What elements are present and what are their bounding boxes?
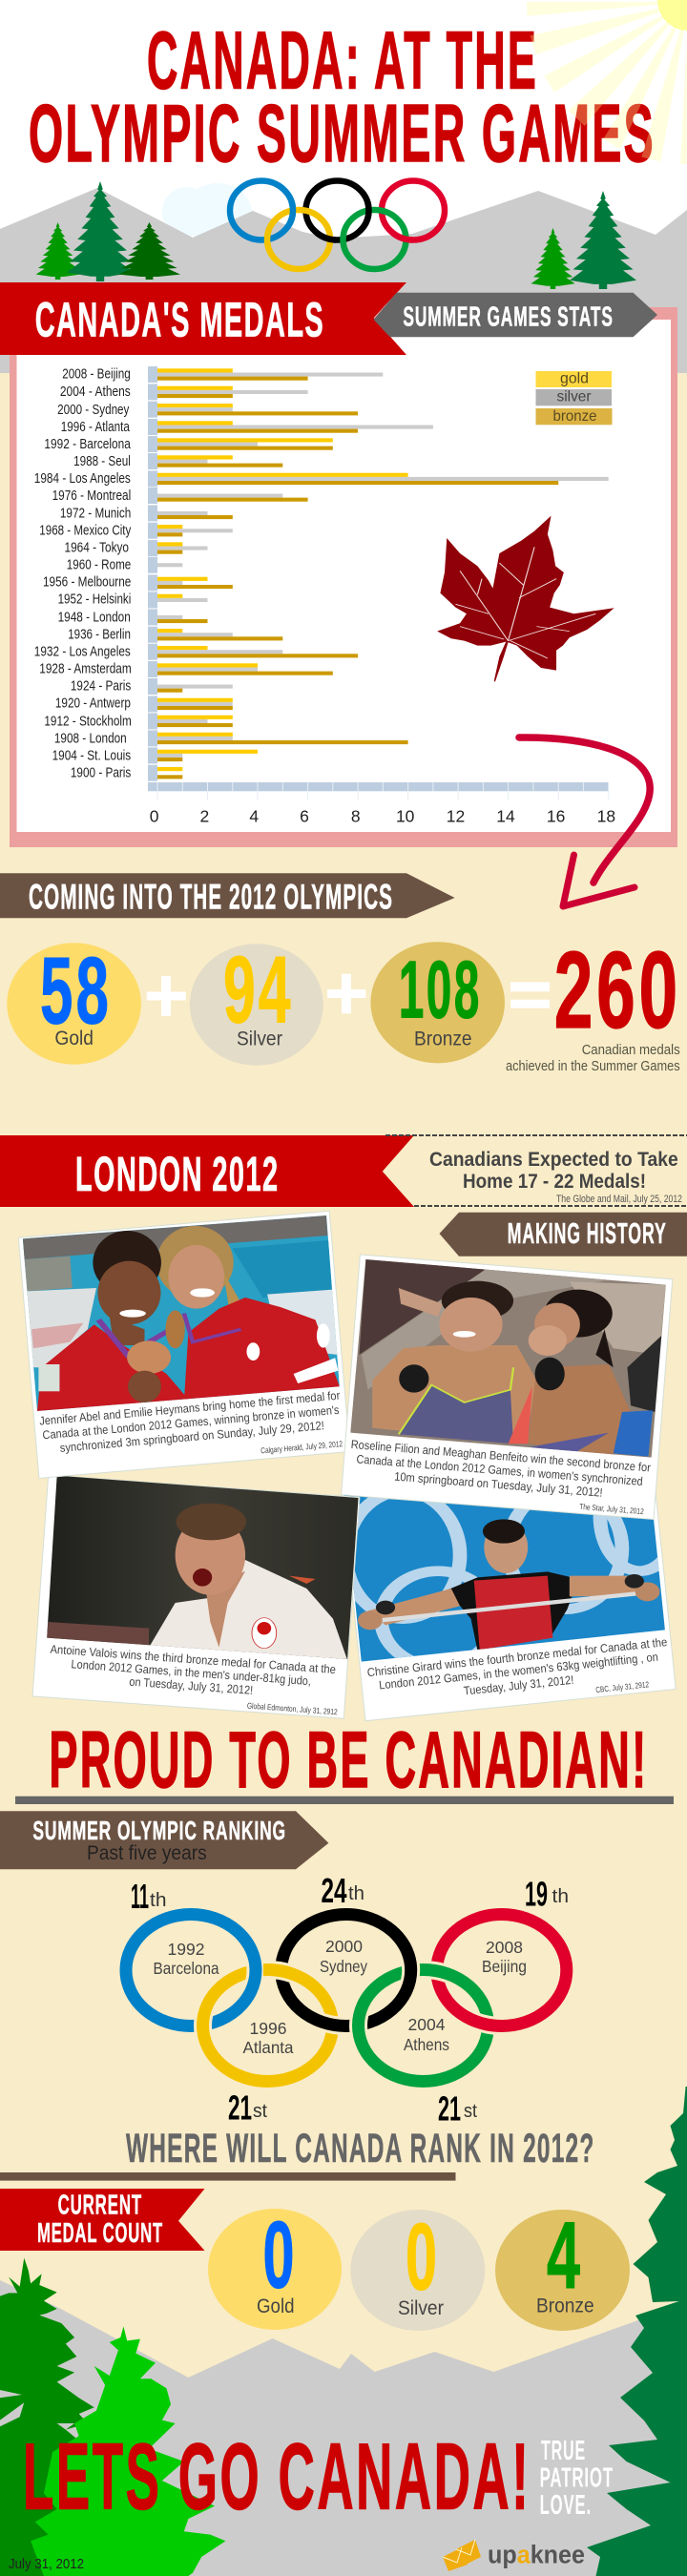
caption: Jennifer Abel and Emilie Heymans bring home the first medal for — [39, 1389, 341, 1428]
row labels: 1956 - Melbourne — [43, 575, 131, 591]
row labels: 1952 - Helsinki — [58, 592, 131, 608]
card background — [342, 1255, 673, 1519]
icon: envelopes — [443, 2540, 481, 2571]
silver count: Silver — [398, 2297, 444, 2319]
row labels: 1924 - Paris — [71, 679, 131, 695]
ring labels: 2004 — [408, 2015, 446, 2034]
photo card 3: antoine valois — [32, 1469, 364, 1718]
banner: current medal count — [0, 2189, 204, 2251]
cloud — [162, 183, 252, 244]
plus sign — [147, 976, 186, 1016]
photo: weightlifter — [344, 1495, 665, 1662]
icon: maple leaf — [437, 516, 614, 682]
top trees left — [36, 181, 180, 281]
banner: making history — [439, 1213, 687, 1257]
x axis labels: 2 — [200, 807, 209, 826]
ring labels: Barcelona — [153, 1959, 219, 1978]
caption: Tuesday, July 31, 2012! — [463, 1673, 574, 1698]
x axis labels — [150, 807, 615, 826]
row labels: 1900 - Paris — [71, 766, 131, 781]
tree: bottom right large — [587, 2087, 687, 2576]
tree: bottom left dark — [0, 2258, 132, 2576]
row labels: 1976 - Montreal — [52, 488, 131, 504]
row labels: 2000 - Sydney — [57, 403, 130, 418]
bronze total — [370, 942, 505, 1063]
legend: gold — [560, 370, 589, 387]
gold total: Gold — [54, 1028, 94, 1049]
rank: 1992: 11 — [131, 1877, 149, 1916]
arrow: hand drawn red — [519, 737, 650, 906]
ring labels: 2000 — [325, 1937, 363, 1956]
legend — [536, 370, 613, 425]
row labels: 1992 - Barcelona — [44, 437, 132, 452]
bars — [148, 366, 609, 781]
tagline: true patriot love: PATRIOT — [540, 2463, 614, 2494]
x axis labels: 14 — [496, 807, 515, 826]
tree: small bright — [531, 228, 574, 289]
caption: synchronized 3m springboard on Sunday, July 29, 2012! — [59, 1419, 324, 1455]
caption — [347, 1438, 651, 1516]
gold count — [208, 2202, 342, 2330]
row labels: 1948 - London — [58, 611, 131, 626]
rings — [126, 1914, 567, 2082]
caption: on Tuesday, July 31, 2012! — [129, 1675, 254, 1697]
date: July 31, 2012 — [9, 2556, 84, 2572]
equals sign — [510, 982, 550, 1008]
gold total: 58 — [40, 937, 112, 1044]
bar chart: medals by games — [34, 366, 615, 826]
row labels: 1920 - Antwerp — [55, 696, 131, 712]
row labels: 1984 - Los Angeles — [34, 471, 131, 487]
caption: Roseline Filion and Meaghan Benfeito win the second bronze for — [350, 1438, 651, 1475]
mountains top — [0, 188, 687, 373]
caption: CBC, July 31, 2912 — [595, 1679, 650, 1694]
caption: London 2012 Games, in the women's 63kg weightlifting , on — [379, 1651, 658, 1693]
row labels — [34, 367, 132, 781]
row labels: 1988 - Seul — [73, 454, 131, 469]
brown divider — [0, 2172, 456, 2181]
x axis labels: 18 — [597, 807, 615, 826]
card background — [32, 1475, 360, 1718]
row labels: 1932 - Los Angeles — [34, 645, 131, 660]
tree: large — [570, 191, 636, 289]
divider bar — [15, 1797, 674, 1804]
ring labels: Athens — [404, 2035, 449, 2054]
wordmark: upaknee — [488, 2540, 585, 2568]
photo: divers with medal — [17, 1212, 346, 1415]
silver count: 0 — [406, 2204, 437, 2309]
ring labels: 2008 — [486, 1938, 523, 1957]
callout: expected medals: Home 17 - 22 Medals! — [463, 1171, 646, 1193]
banner: summer games stats — [374, 293, 657, 337]
x axis labels: 8 — [351, 807, 361, 826]
x axis labels: 12 — [447, 807, 465, 826]
row labels: 1936 - Berlin — [68, 628, 131, 643]
photo card 4: christine girard — [342, 1488, 677, 1721]
bronze total: 108 — [399, 945, 482, 1036]
banner: london 2012 — [0, 1135, 414, 1207]
tree: dark — [118, 222, 180, 280]
banner: coming into the 2012 olympics: COMING INTO THE 2012 OLYMPICS — [29, 878, 393, 916]
banner: summer olympic ranking: Past five years — [87, 1842, 207, 1864]
silver count — [350, 2204, 485, 2331]
x axis band — [148, 782, 609, 800]
banner: current medal count: CURRENT — [58, 2191, 142, 2221]
tree: large — [67, 181, 134, 281]
row labels: 1908 - London — [54, 732, 127, 747]
sun rays — [527, 2, 687, 164]
banner: london 2012: LONDON 2012 — [75, 1147, 279, 1201]
title — [29, 15, 656, 179]
bronze count: Bronze — [536, 2296, 594, 2316]
top trees right — [531, 191, 636, 289]
tree: small bright — [36, 222, 80, 280]
rank: 1996: 21 — [228, 2088, 252, 2128]
rank: 1992: th — [150, 1890, 166, 1911]
legend: bronze — [553, 408, 597, 425]
logo: upaknee — [443, 2540, 585, 2571]
card background — [342, 1457, 676, 1721]
sun — [657, 0, 687, 31]
x axis labels: 4 — [249, 807, 259, 826]
x axis labels: 6 — [300, 807, 309, 826]
bronze count: 4 — [547, 2202, 580, 2308]
silver total: Silver — [237, 1028, 282, 1049]
mountains bottom — [0, 2280, 687, 2576]
photo: divers celebrating — [346, 1257, 670, 1460]
tagline: true patriot love: LOVE. — [540, 2490, 592, 2521]
caption: London 2012 Games, in the men's under-81kg judo, — [71, 1657, 311, 1688]
photo card 2: roseline filion and meaghan benfeito — [342, 1255, 673, 1519]
caption: Calgary Herald, July 29, 2012 — [260, 1439, 344, 1455]
rank: 2008: 19 — [525, 1874, 548, 1914]
banner: summer olympic ranking — [0, 1811, 328, 1869]
ring labels: 1992 — [168, 1940, 204, 1959]
ring labels: 1996 — [250, 2019, 286, 2038]
silver total — [190, 937, 323, 1066]
bronze count — [495, 2202, 630, 2331]
banner: summer olympic ranking: SUMMER OLYMPIC RANKING — [32, 1816, 286, 1845]
row labels: 1928 - Amsterdam — [39, 662, 132, 677]
row labels: 1968 - Mexico City — [39, 524, 132, 539]
plus sign — [327, 974, 365, 1013]
rank: 2000: th — [348, 1883, 364, 1904]
caption: Canada at the London 2012 Games, in women's synchronized — [356, 1452, 643, 1488]
callout: expected medals — [385, 1135, 687, 1206]
rank: 2004: 21 — [438, 2089, 461, 2128]
row labels: 2008 - Beijing — [62, 367, 131, 383]
olympic rings ranking — [126, 1871, 569, 2128]
x axis labels: 16 — [547, 807, 565, 826]
tree: bottom left bright — [31, 2326, 225, 2576]
rank: 2008: th — [552, 1886, 569, 1907]
row labels: 2004 - Athens — [60, 384, 131, 400]
legend: silver — [557, 389, 592, 405]
panel border — [10, 307, 677, 847]
rank: 2004: st — [464, 2101, 477, 2122]
card background — [18, 1211, 350, 1478]
caption: The Star, July 31, 2012 — [579, 1502, 644, 1516]
medal totals equation — [7, 930, 681, 1074]
bronze total: Bronze — [414, 1028, 471, 1049]
x axis labels: 0 — [150, 807, 159, 826]
row labels: 1996 - Atlanta — [61, 420, 131, 435]
ring labels: Beijing — [482, 1957, 527, 1976]
rank: 1996: st — [253, 2101, 267, 2122]
panel interior — [17, 320, 671, 832]
banner: current medal count: MEDAL COUNT — [37, 2218, 163, 2249]
olympic rings top — [230, 181, 445, 269]
row labels: 1904 - St. Louis — [52, 749, 131, 764]
row labels: 1972 - Munich — [60, 507, 131, 522]
ring labels: Sydney — [320, 1957, 367, 1976]
photo card 1: jennifer abel and emilie heymans — [17, 1211, 350, 1478]
row labels: 1964 - Tokyo — [65, 541, 129, 556]
rank: 2000: 24 — [321, 1871, 347, 1910]
banner: canada's medals: CANADA'S MEDALS — [35, 292, 324, 346]
sky background — [0, 0, 687, 373]
caption — [39, 1389, 344, 1474]
row labels: 1912 - Stockholm — [44, 715, 132, 730]
caption — [366, 1635, 672, 1717]
gold total — [7, 937, 141, 1065]
banner: coming into the 2012 olympics — [0, 873, 455, 918]
photo: judoka — [44, 1469, 364, 1663]
tagline: true patriot love: TRUE — [541, 2436, 586, 2466]
caption — [47, 1643, 342, 1716]
row labels: 1960 - Rome — [67, 558, 131, 573]
tagline: true patriot love — [540, 2436, 614, 2521]
gold count: 0 — [263, 2202, 294, 2307]
caption: Canada at the London 2012 Games, winning bronze in women's — [42, 1403, 340, 1442]
caption: 10m springboard on Tuesday, July 31, 2012! — [394, 1470, 603, 1500]
ring labels — [153, 1937, 527, 2057]
silver total: 94 — [223, 937, 294, 1042]
caption: Antoine Valois wins the third bronze medal for Canada at the — [50, 1643, 336, 1676]
banner: canada's medals — [0, 282, 406, 355]
caption: Global Edmonton, July 31, 2912 — [247, 1701, 338, 1716]
gold count: Gold — [257, 2296, 294, 2317]
total caption — [506, 1042, 680, 1074]
x axis labels: 10 — [396, 807, 415, 826]
current medals — [208, 2202, 630, 2331]
ring labels: Atlanta — [242, 2038, 294, 2057]
